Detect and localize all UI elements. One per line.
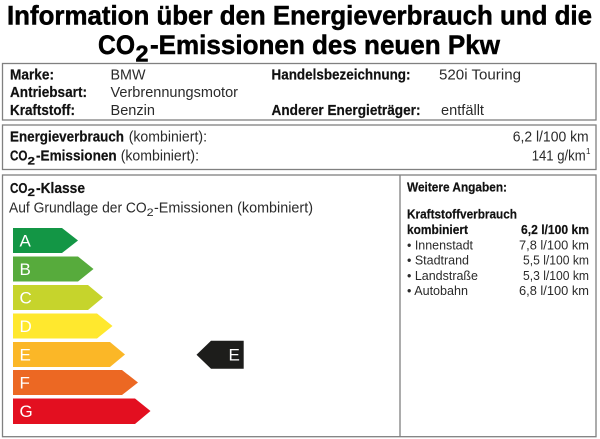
panel: further details: • Landstraße	[407, 269, 478, 283]
panel: further details: • Stadtrand	[407, 254, 469, 268]
panel: vehicle data: Marke:	[10, 68, 54, 84]
panel: further details	[407, 181, 589, 298]
panel: further details: 6,2 l/100 km	[521, 223, 589, 237]
text: basis of the class: -Emissionen (kombiniert)	[154, 200, 313, 216]
heading: CO2-Klasse: 2	[28, 187, 35, 199]
arrow: current class marker E	[196, 341, 244, 369]
arrow: class D: D	[20, 317, 32, 336]
arrow: class B	[13, 256, 94, 282]
panel: further details: 5,5 l/100 km	[523, 254, 589, 268]
arrow: class A	[13, 228, 78, 253]
panel: consumption and emissions: 6,2 l/100 km	[513, 130, 589, 146]
divider	[399, 175, 401, 436]
heading: CO2-Klasse: CO	[10, 181, 28, 197]
arrow: class G	[13, 398, 150, 424]
text: basis of the class	[9, 200, 313, 219]
heading: CO2-Klasse	[10, 181, 85, 199]
panel: vehicle data: entfällt	[441, 103, 484, 119]
panel: vehicle data: Verbrennungsmotor	[110, 85, 238, 101]
arrow: class A: A	[20, 232, 32, 250]
title: Information über den Energieverbrauch und die	[7, 0, 592, 30]
arrow: class D	[13, 314, 112, 338]
panel: vehicle data: Antriebsart:	[10, 85, 87, 101]
panel: further details: 5,3 l/100 km	[523, 269, 589, 283]
panel: vehicle data: Kraftstoff:	[10, 103, 75, 119]
panel: consumption and emissions	[2, 125, 596, 170]
text: basis of the class: 2	[147, 207, 154, 219]
arrow: class G: G	[20, 402, 33, 421]
arrow: class E	[13, 342, 125, 367]
panel: further details: kombiniert	[407, 223, 469, 237]
panel: consumption and emissions: Energieverbrauch	[10, 130, 124, 146]
panel: consumption and emissions: (kombiniert):	[129, 130, 207, 146]
arrow: current class marker E: E	[228, 346, 240, 364]
panel: vehicle data: Handelsbezeichnung:	[272, 68, 410, 84]
panel: vehicle data: Anderer Energieträger:	[272, 103, 420, 119]
panel: further details: 6,8 l/100 km	[519, 284, 589, 298]
panel: further details: Weitere Angaben:	[407, 181, 507, 195]
panel: consumption and emissions: -Emissionen	[36, 149, 117, 165]
panel: CO2 class	[2, 175, 596, 437]
heading: CO2-Klasse: -Klasse	[36, 181, 85, 197]
panel: vehicle data: Benzin	[110, 103, 155, 119]
arrow: class F	[13, 370, 138, 395]
panel: consumption and emissions: (kombiniert):	[121, 149, 199, 165]
panel: consumption and emissions: 2	[28, 156, 35, 168]
arrow: class B: B	[20, 260, 31, 279]
panel: consumption and emissions: CO	[10, 149, 28, 165]
panel: vehicle data: 520i Touring	[439, 68, 521, 84]
title	[7, 0, 592, 66]
title: CO	[98, 30, 135, 60]
title: 2	[136, 40, 148, 66]
title: -Emissionen des neuen Pkw	[150, 30, 500, 60]
panel: vehicle data	[2, 64, 596, 120]
panel: further details: • Autobahn	[407, 284, 468, 298]
panel: further details: Kraftstoffverbrauch	[407, 207, 517, 221]
panel: consumption and emissions: 1	[586, 147, 591, 156]
panel: consumption and emissions: 141 g/km	[532, 149, 586, 165]
arrow: class C: C	[20, 288, 32, 308]
arrow: class C	[13, 285, 103, 310]
arrow: class F: F	[20, 374, 30, 392]
text: basis of the class: Auf Grundlage der CO	[9, 200, 147, 216]
panel: further details: • Innenstadt	[407, 238, 474, 252]
arrow: class E: E	[20, 346, 31, 364]
panel: further details: 7,8 l/100 km	[519, 238, 589, 252]
panel: vehicle data: BMW	[110, 68, 146, 84]
